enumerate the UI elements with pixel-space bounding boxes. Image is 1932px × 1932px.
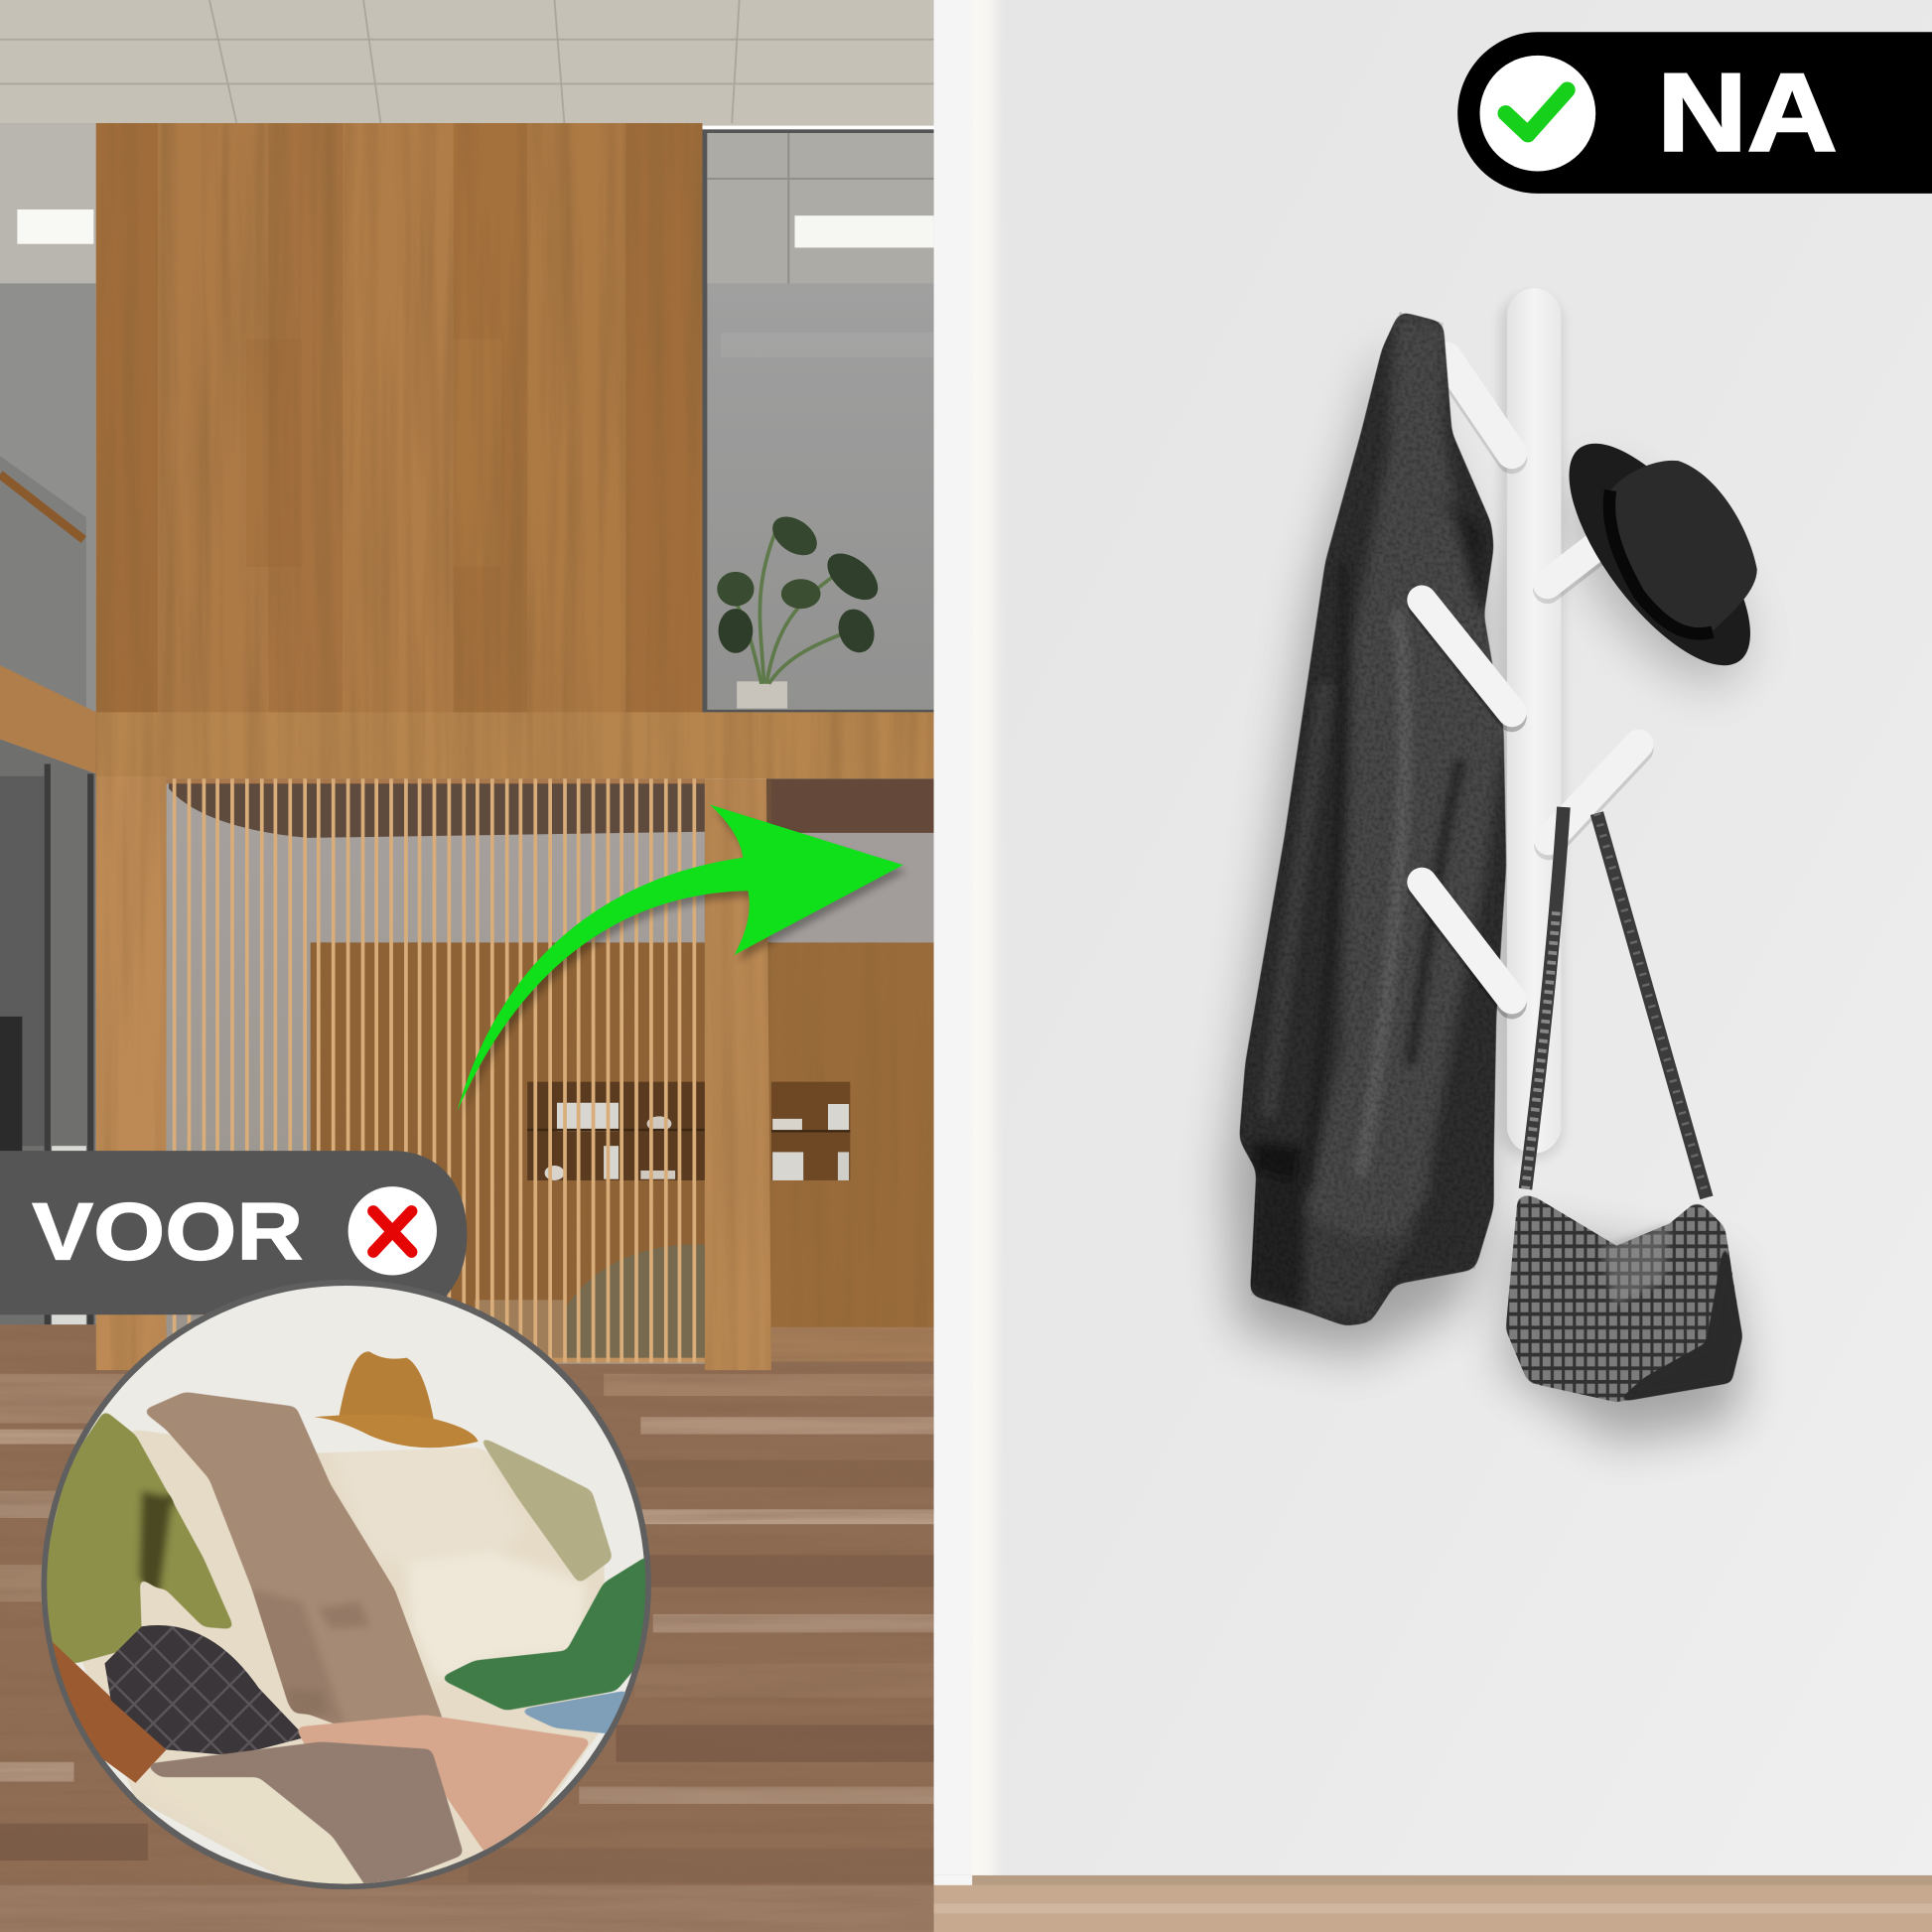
quilted bag <box>104 1625 306 1756</box>
badge: VOOR <box>0 1151 467 1314</box>
coat rack <box>1447 288 1639 1154</box>
left side glass and gallery <box>0 123 96 1423</box>
label: VOOR: VOOR <box>32 1186 303 1277</box>
wood wall <box>96 123 702 776</box>
left scene: interior room <box>0 0 934 1932</box>
denim <box>524 1692 625 1733</box>
peach blanket <box>296 1716 592 1855</box>
brown coat <box>143 1392 444 1727</box>
olive blazer <box>479 1436 613 1584</box>
orange pouch <box>52 1641 167 1783</box>
wooden floor <box>0 1324 934 1932</box>
green shirt <box>440 1555 649 1711</box>
badge: NA <box>1457 32 1932 194</box>
upper left peg <box>1447 357 1512 459</box>
wooden slat screen <box>167 778 705 1363</box>
green curved arrow <box>457 804 906 1118</box>
orange hat <box>314 1351 479 1448</box>
sofa <box>73 1430 604 1897</box>
green sweater <box>45 1411 234 1663</box>
icon: red cross <box>348 1186 437 1276</box>
right pegs <box>1548 542 1639 845</box>
bag body <box>1506 1192 1742 1402</box>
icon: plant <box>717 508 887 709</box>
black hat <box>1537 416 1782 693</box>
bag strap <box>1525 807 1707 1197</box>
ceiling <box>0 0 934 126</box>
wall shadows <box>1227 296 1776 1442</box>
jacket body <box>1240 312 1506 1325</box>
wood pillars <box>96 776 771 1370</box>
far room with shelf <box>766 778 934 1327</box>
front pegs <box>1422 600 1512 1004</box>
label: NA: NA <box>1657 50 1837 174</box>
black jacket <box>1232 308 1516 1330</box>
taupe blanket <box>145 1742 464 1891</box>
right floor <box>934 1875 1932 1932</box>
before photo: cluttered sofa <box>45 1283 649 1897</box>
icon: green check <box>1480 56 1595 172</box>
rack post <box>1507 288 1561 1154</box>
room behind slats <box>167 778 709 1364</box>
wood beam <box>96 712 934 778</box>
upper window with plant <box>702 129 934 717</box>
shoulder bag <box>1506 807 1742 1402</box>
jacket fabric texture <box>1232 308 1516 1330</box>
right scene: white wall and floor <box>934 0 1932 1932</box>
jacket folds <box>1269 567 1460 1182</box>
